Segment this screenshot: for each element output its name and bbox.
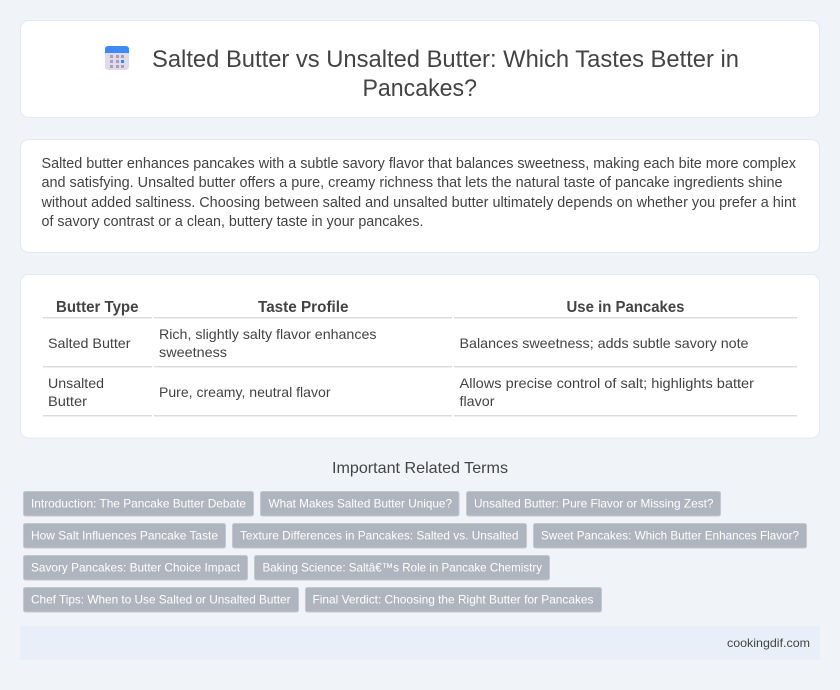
table header: Use in Pancakes — [566, 299, 685, 316]
panel: header — [20, 20, 820, 118]
related term tags — [24, 492, 806, 612]
table row: unsalted butter: Unsalted — [48, 375, 104, 391]
tag — [306, 588, 602, 612]
text block: summary: and satisfying. Unsalted butter offers a pure, creamy richness that lets the natural taste of pancake ingredients shine — [42, 175, 782, 191]
table row: unsalted butter: flavor — [460, 393, 495, 409]
table row: salted butter: Rich, slightly salty flavor enhances — [159, 326, 376, 342]
table row: unsalted butter: Butter — [48, 393, 87, 409]
tag — [232, 524, 526, 548]
text block: summary: of savory contrast or a clean, buttery taste in your pancakes. — [42, 214, 424, 230]
text block: summary: Salted butter enhances pancakes with a subtle savory flavor that balances sweetness, making each bite more complex — [42, 156, 797, 172]
tag — [534, 524, 806, 548]
text block: summary: without added saltiness. Choosing between salted and unsalted butter ultimately depends on whether you prefer a hint — [40, 195, 796, 211]
tag: Final Verdict: Choosing the Right Butter for Pancakes — [312, 592, 594, 606]
table row: salted butter: Salted Butter — [48, 335, 131, 351]
tag: Unsalted Butter: Pure Flavor or Missing Zest? — [474, 496, 714, 510]
table header: Taste Profile — [258, 299, 349, 316]
tag: Baking Science: Saltâ€™s Role in Pancake Chemistry — [262, 560, 542, 574]
table row: unsalted butter: Pure, creamy, neutral flavor — [159, 384, 331, 400]
text block: summary — [40, 156, 797, 230]
table header — [43, 299, 797, 318]
tag: Savory Pancakes: Butter Choice Impact — [31, 560, 241, 574]
panel: summary paragraph — [20, 140, 820, 252]
tag: Chef Tips: When to Use Salted or Unsalted Butter — [31, 592, 290, 606]
tag — [466, 492, 720, 516]
tag — [24, 492, 254, 516]
tag: What Makes Salted Butter Unique? — [268, 496, 452, 510]
footer — [20, 626, 820, 660]
panel: comparison table — [20, 274, 820, 438]
title: Pancakes? — [362, 75, 477, 102]
table header: Butter Type — [56, 299, 139, 316]
tag: How Salt Influences Pancake Taste — [31, 528, 218, 542]
tag — [254, 556, 550, 580]
table row: salted butter: sweetness — [159, 344, 227, 360]
tag — [260, 492, 459, 516]
tag — [24, 556, 248, 580]
icon: calendar — [105, 46, 129, 70]
table row: salted butter: Balances sweetness; adds subtle savory note — [460, 335, 749, 351]
table row: salted butter — [43, 326, 797, 368]
title: Salted Butter vs Unsalted Butter: Which Tastes Better in — [152, 46, 739, 73]
tag — [24, 524, 226, 548]
footer source: cookingdif.com — [727, 636, 810, 650]
tag: Sweet Pancakes: Which Butter Enhances Flavor? — [541, 528, 799, 542]
tag: Introduction: The Pancake Butter Debate — [31, 496, 246, 510]
table row: unsalted butter — [43, 375, 797, 416]
table row: unsalted butter: Allows precise control of salt; highlights batter — [460, 375, 754, 391]
tag: Texture Differences in Pancakes: Salted vs. Unsalted — [240, 528, 518, 542]
heading: important related terms: Important Related Terms — [332, 460, 508, 477]
tag — [24, 588, 298, 612]
title — [152, 46, 739, 102]
